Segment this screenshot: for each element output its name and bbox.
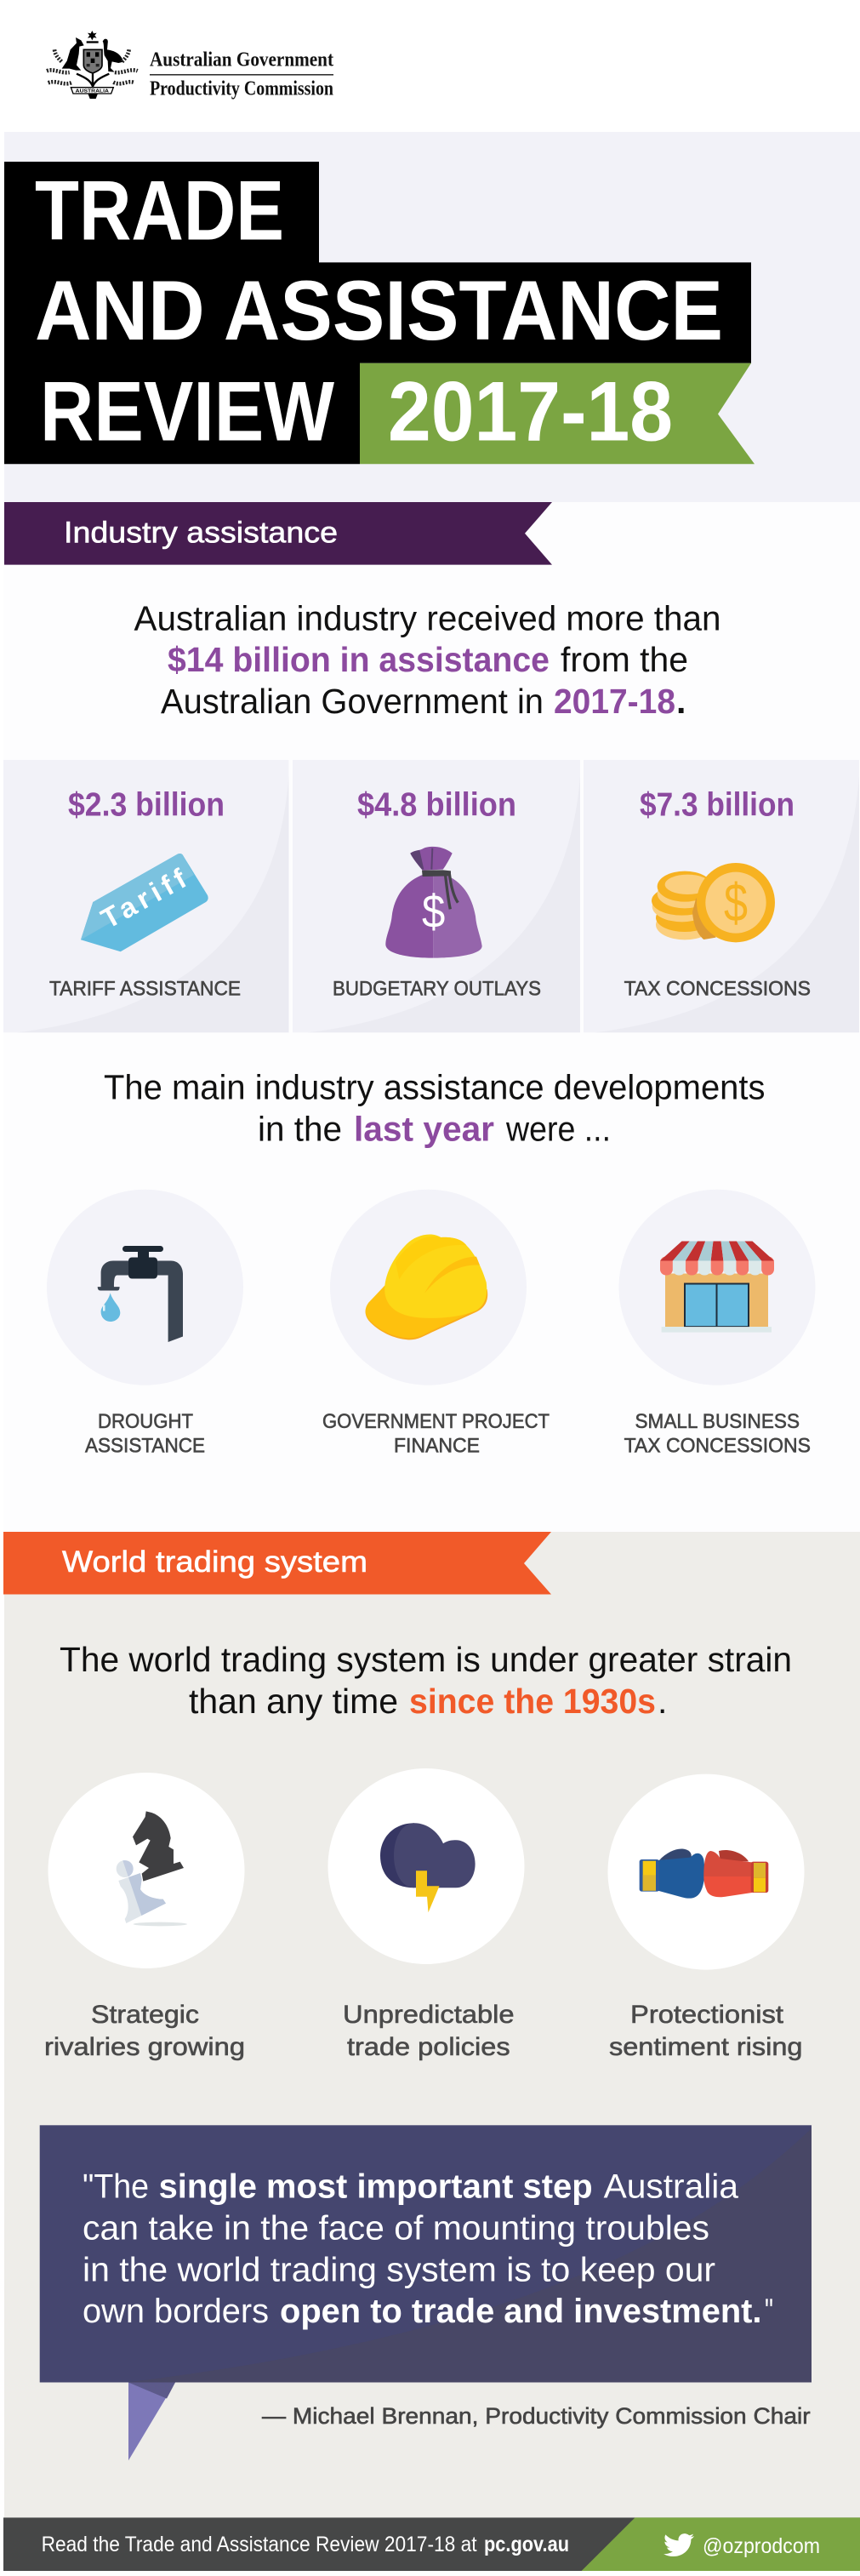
logo text: [150, 49, 333, 100]
icon: shop front: [660, 1241, 774, 1333]
quote text: open to trade and investment.: [280, 2293, 762, 2330]
quote text: Australia: [604, 2168, 739, 2205]
logo text: Australian Government: [150, 49, 333, 71]
quote text: in the world trading system is to keep our: [83, 2251, 715, 2288]
title: 2017-18: [388, 363, 673, 458]
developments heading: in the: [258, 1110, 342, 1149]
intro text: .: [676, 682, 686, 721]
ribbon heading: industry assistance: [4, 502, 552, 565]
footer link text: Read the Trade and Assistance Review 2017-18 at: [42, 2533, 477, 2556]
quote text: single most important step: [159, 2168, 593, 2205]
quote text: [83, 2168, 773, 2330]
panel: world trading system: [3, 1532, 860, 2517]
icon: boxing gloves: [640, 1849, 768, 1899]
icon: coat of arms: [47, 31, 138, 99]
card: tariff assistance: $2.3 billion: [68, 787, 225, 824]
item: strategic rivalries growing: rivalries growing: [44, 2033, 245, 2061]
year ribbon: [360, 363, 755, 464]
card: budgetary outlays: $4.8 billion: [357, 787, 516, 824]
quote text: own borders: [83, 2293, 269, 2330]
item: drought assistance: [47, 1190, 243, 1458]
card: budgetary outlays: [293, 760, 580, 1032]
item: unpredictable trade policies: [328, 1768, 524, 2061]
developments heading: The main industry assistance developments: [104, 1068, 766, 1107]
developments heading: were ...: [505, 1110, 611, 1149]
item: unpredictable trade policies: Unpredictable: [343, 2001, 515, 2029]
icon: gold coins: [652, 863, 775, 942]
item: strategic rivalries growing: Strategic: [91, 2001, 199, 2029]
quote attribution: — Michael Brennan, Productivity Commission Chair: [262, 2403, 811, 2429]
callout: quote box: [40, 2125, 812, 2460]
icon: twitter bird: [664, 2533, 694, 2556]
intro text: [134, 599, 721, 721]
twitter handle: @ozprodcom: [703, 2534, 820, 2558]
footer link text: pc.gov.au: [484, 2533, 569, 2556]
card: tax concessions: $7.3 billion: [640, 787, 795, 824]
item: government project finance: [322, 1190, 550, 1458]
intro text: Australian Government in: [161, 682, 544, 721]
item: small business tax concessions: [619, 1190, 815, 1458]
ribbon heading: world trading system: World trading system: [62, 1545, 367, 1579]
card: tariff assistance: TARIFF ASSISTANCE: [49, 977, 241, 1001]
footer: [3, 2517, 860, 2571]
icon: tariff tag: [81, 854, 208, 951]
intro text: Australian industry received more than: [134, 599, 721, 638]
item: unpredictable trade policies: trade policies: [347, 2033, 510, 2061]
item: drought assistance: DROUGHT: [98, 1410, 193, 1433]
developments heading: last year: [354, 1110, 494, 1149]
icon: gold coins: $: [724, 873, 748, 933]
panel: industry assistance: [3, 502, 860, 1532]
quote text: "The: [83, 2168, 149, 2205]
logo text: Productivity Commission: [150, 77, 333, 100]
world trading intro text: [60, 1640, 792, 1721]
ribbon heading: industry assistance: Industry assistance: [64, 517, 338, 550]
world trading intro text: since the 1930s: [409, 1682, 656, 1721]
world trading intro text: .: [658, 1682, 667, 1721]
icon: hard hat: [366, 1235, 487, 1339]
card: tax concessions: TAX CONCESSIONS: [624, 977, 811, 1001]
item: protectionist sentiment rising: Protectionist: [630, 2001, 784, 2029]
card: budgetary outlays: BUDGETARY OUTLAYS: [333, 977, 541, 1001]
world trading intro text: The world trading system is under greater strain: [60, 1640, 792, 1679]
item: small business tax concessions: TAX CONCESSIONS: [624, 1435, 811, 1458]
ribbon heading: world trading system: [3, 1532, 551, 1595]
quote text: can take in the face of mounting troubles: [83, 2210, 709, 2248]
title: [35, 163, 723, 458]
icon: money bag: $: [422, 885, 445, 938]
intro text: from the: [561, 640, 688, 679]
item: protectionist sentiment rising: [607, 1774, 805, 2061]
title: REVIEW: [40, 363, 334, 458]
card: tariff assistance: [3, 760, 289, 1032]
icon: money bag: [385, 847, 482, 958]
icon: coat of arms: AUSTRALIA: [76, 89, 109, 94]
developments heading: [104, 1068, 766, 1149]
world trading intro text: than any time: [189, 1682, 398, 1721]
icon: storm cloud with lightning: [380, 1823, 476, 1912]
icon: tap and water drop: [98, 1246, 183, 1342]
item: strategic rivalries growing: [44, 1773, 245, 2061]
icon: tariff tag: Tariff: [95, 862, 192, 934]
item: small business tax concessions: SMALL BUSINESS: [635, 1410, 800, 1433]
header logo: Australian Government Productivity Commission: [47, 31, 333, 100]
intro text: $14 billion in assistance: [168, 640, 550, 679]
icon: chess knight and pawn: [117, 1811, 187, 1926]
card: tax concessions: [584, 760, 859, 1032]
title background block: [4, 162, 751, 464]
item: government project finance: GOVERNMENT PROJECT: [322, 1410, 550, 1433]
title: AND ASSISTANCE: [35, 263, 723, 357]
item: government project finance: FINANCE: [394, 1435, 480, 1458]
panel: title band: [4, 132, 860, 502]
item: protectionist sentiment rising: sentiment rising: [609, 2033, 803, 2061]
title: TRADE: [35, 163, 284, 258]
intro text: 2017-18: [554, 682, 675, 721]
quote text: ": [765, 2293, 773, 2330]
item: drought assistance: ASSISTANCE: [85, 1435, 205, 1458]
